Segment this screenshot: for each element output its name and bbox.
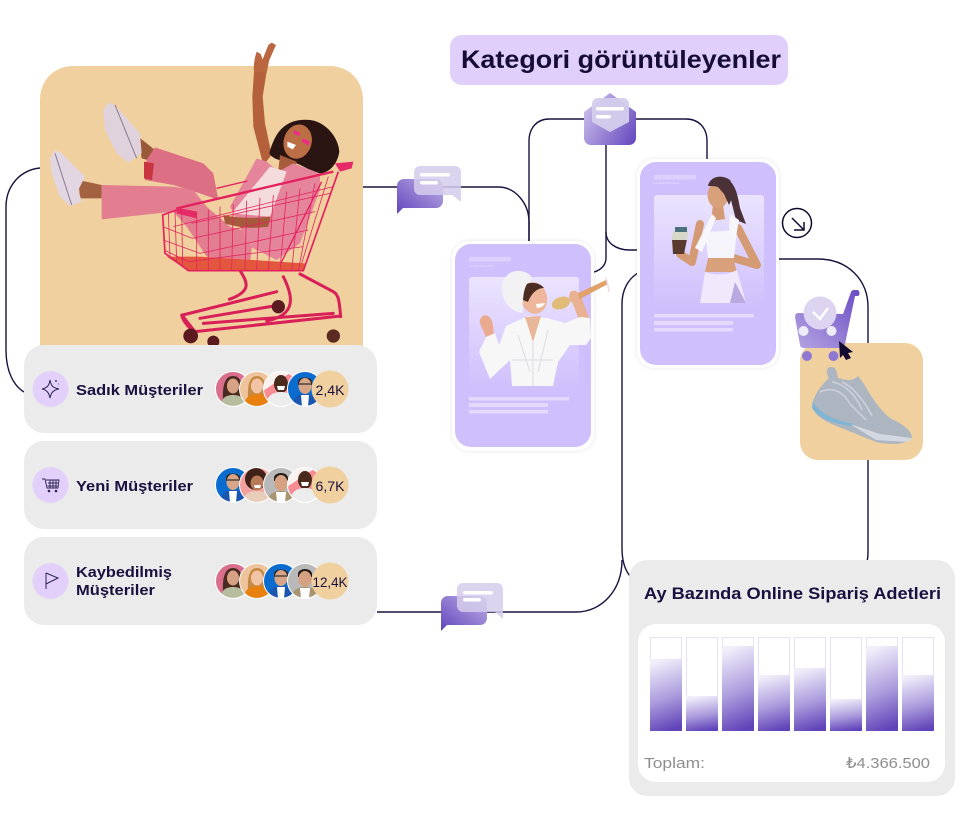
avatars and count: 12,4K [312, 574, 348, 590]
card: bathrobe woman: 11 MINUTES AGO [469, 264, 494, 268]
avatars and count [215, 370, 348, 408]
heading: Ay Bazında Online Sipariş Adetleri: Ay Bazında Online Sipariş Adetleri [644, 584, 941, 603]
icon: chat bubbles top [397, 166, 461, 214]
avatars and count: 6,7K [316, 478, 345, 494]
illustration: woman with shaker [672, 177, 757, 303]
illustration: woman in shopping cart [50, 43, 353, 348]
label: Kaybedilmiş Müşteriler: Müşteriler [76, 582, 155, 599]
card: sporty woman [637, 159, 779, 368]
panel: product sneaker [800, 343, 923, 460]
label: Sadık Müşteriler: Sadık Müşteriler [76, 382, 203, 399]
panel: monthly online orders [629, 560, 955, 796]
panel: Sadık Müşteriler [24, 345, 377, 433]
icon: chat bubbles bottom [441, 583, 503, 631]
panel: Kaybedilmiş Müşteriler [24, 537, 377, 625]
icon: flag [32, 563, 68, 599]
bar chart [650, 638, 934, 731]
panel: Yeni Müşteriler [24, 441, 377, 529]
illustration: woman singing [479, 271, 609, 386]
icon: basket [32, 467, 68, 503]
avatars and count: 2,4K [316, 382, 345, 398]
label: Yeni Müşteriler: Yeni Müşteriler [76, 478, 193, 495]
heading: Kategori görüntüleyenler [450, 35, 788, 85]
panel: shopper photo [40, 43, 363, 350]
icon: arrow in circle [782, 208, 812, 238]
card: bathrobe woman [452, 241, 609, 451]
connector lines [6, 119, 868, 612]
heading: Kategori görüntüleyenler: Kategori görüntüleyenler [461, 46, 781, 74]
label: Kaybedilmiş Müşteriler: Kaybedilmiş [76, 564, 172, 581]
icon: open envelope [584, 93, 636, 145]
card: sporty woman: 12 MINUTES AGO [654, 181, 680, 185]
avatars and count [215, 562, 348, 600]
icon: sparkle [32, 371, 68, 407]
icon: shopping cart with check [795, 290, 860, 361]
total value: ₺4.366.500 [846, 755, 930, 772]
icon: cursor [839, 341, 853, 360]
illustration: sneaker [812, 367, 912, 444]
total label: Toplam: [644, 755, 705, 772]
avatars and count [215, 466, 348, 504]
